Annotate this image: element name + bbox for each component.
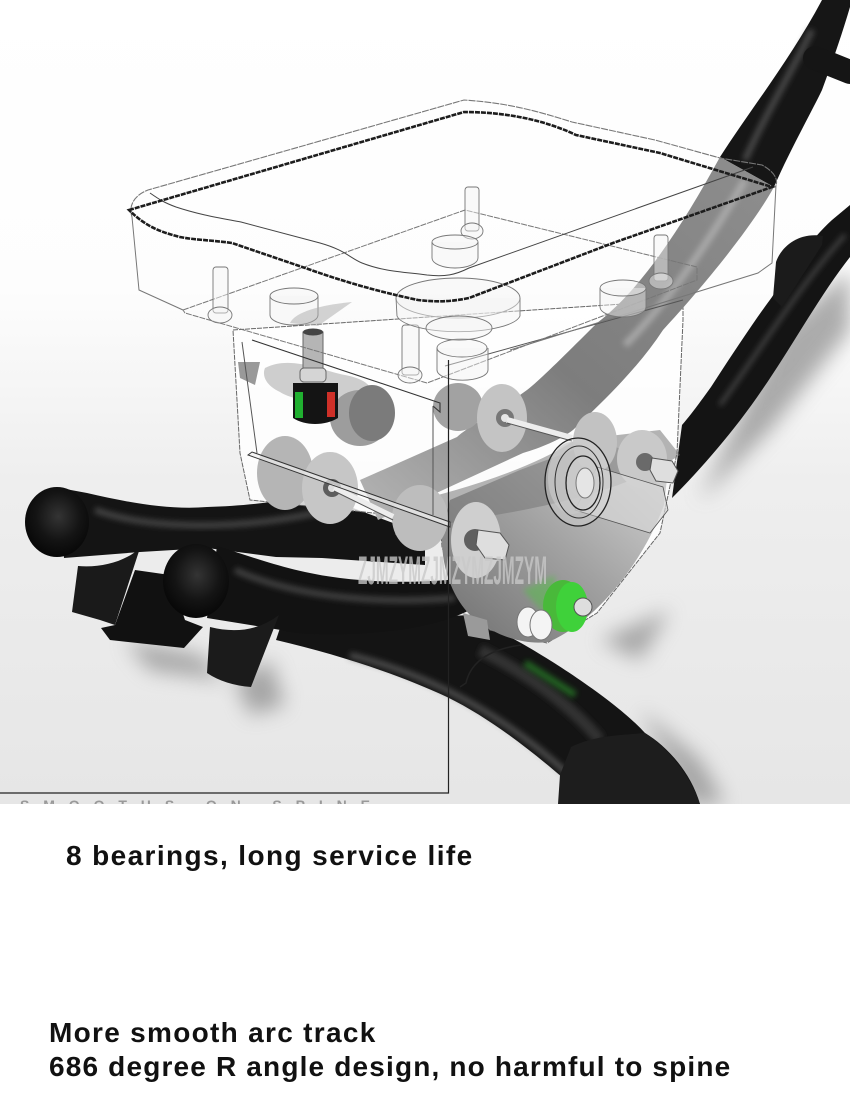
- lower carriage gray body: [442, 440, 668, 643]
- clamp and bracket: [463, 613, 490, 640]
- rubber stops under handles: [72, 548, 203, 648]
- shafts: [334, 420, 572, 517]
- green reflection on track: [525, 663, 575, 695]
- caption: arc track: More smooth arc track: [49, 1017, 377, 1048]
- left handle: [25, 487, 425, 565]
- soft floor shadows: [125, 270, 850, 804]
- large center disc: [396, 278, 520, 318]
- seat inner curve: [150, 167, 753, 276]
- inner arc band behind wheels: [395, 430, 680, 535]
- caption: bearings: 8 bearings, long service life: [66, 840, 474, 871]
- translucent disc: [264, 363, 375, 400]
- side rung: [815, 58, 850, 72]
- seat outer outline: [131, 100, 777, 217]
- transparent seat tray walls: [132, 185, 776, 383]
- bearing wheels: [257, 383, 678, 578]
- right handle: [163, 544, 470, 687]
- light streaks on band: [625, 180, 745, 345]
- hidden gray shadow blocks: [238, 362, 260, 385]
- green adjusting knob and bolts: [460, 575, 592, 687]
- translucent arc inside carriage: [360, 157, 774, 520]
- product illustration: seat and bearing carriage on arc track: [0, 0, 850, 804]
- seat stitched edge: [129, 112, 772, 301]
- thin callout line: [0, 360, 448, 793]
- cylinder pads: [432, 242, 478, 268]
- caption: arc track: [49, 1017, 731, 1082]
- rubber sleeve on track: [558, 733, 700, 804]
- lower arc track: [276, 615, 700, 804]
- inner frame lines: [242, 300, 683, 515]
- indicator post with green and red marks: [293, 328, 395, 446]
- transparent carriage interior: [233, 300, 683, 643]
- right lower arc frame: [672, 205, 850, 498]
- caption: arc track: 686 degree R angle design, no harmful to spine: [49, 1051, 731, 1082]
- background gradient: [0, 0, 850, 804]
- carriage upper edge plate: [252, 340, 440, 412]
- front stop: [207, 615, 279, 687]
- central gear bearing: [545, 438, 668, 533]
- rubber foot behind right arc: [773, 235, 823, 307]
- nuts: [476, 530, 509, 560]
- seat posts and pads: [208, 187, 673, 383]
- product illustration: seat and bearing carriage on arc track: ZJMZYMZJMZYMZJMZYM: [358, 549, 547, 593]
- thin transparent plate across lower wheels: [248, 452, 450, 527]
- dark slash reflection on pad: [290, 302, 352, 326]
- gray bumper cylinder: [330, 390, 390, 446]
- upper arc frame black part: [720, 0, 850, 187]
